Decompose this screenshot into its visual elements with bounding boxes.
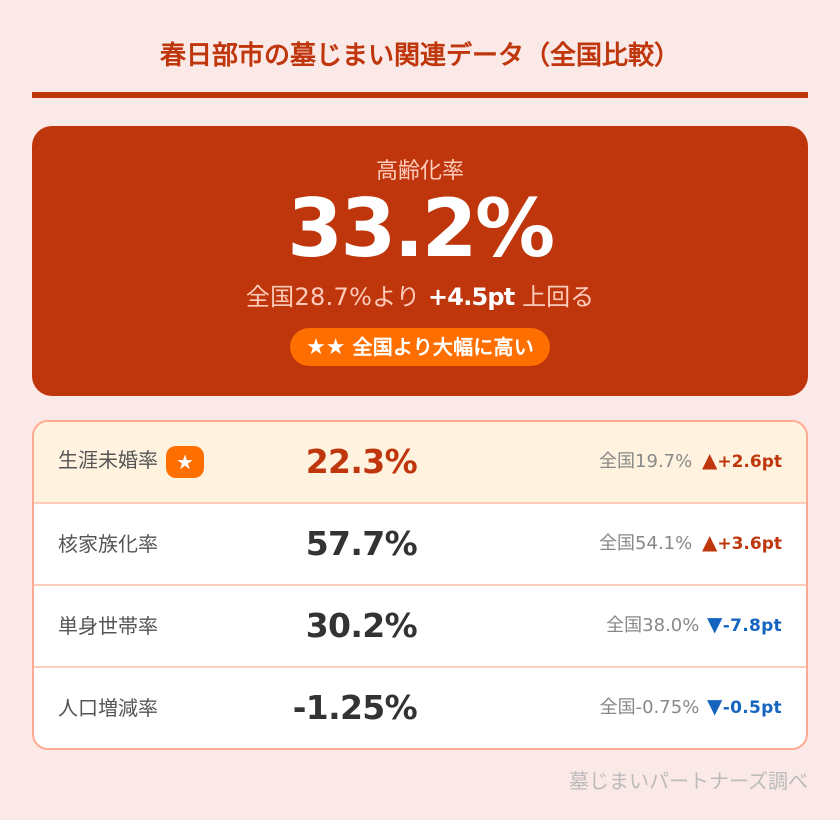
comparison: 全国54.1% ▲+3.6pt	[599, 530, 782, 554]
hero label: 高齢化率	[376, 159, 464, 184]
comparison: 全国38.0% ▼-7.8pt	[606, 612, 782, 636]
value: 22.3%	[306, 442, 417, 481]
hero value: 33.2%	[287, 182, 553, 275]
row: nuclear family rate	[58, 524, 782, 563]
panel: metrics table	[32, 420, 808, 750]
star badge	[166, 446, 204, 478]
label: 人口増減率	[58, 696, 158, 720]
row divider	[34, 502, 806, 504]
label: 単身世帯率	[58, 614, 158, 638]
title rule	[32, 92, 808, 98]
hero badge: ★★ 全国より大幅に高い	[306, 335, 534, 360]
row divider	[34, 666, 806, 668]
hero comparison: 全国28.7%より +4.5pt 上回る	[246, 283, 594, 311]
row divider	[34, 584, 806, 586]
star badge: ★	[176, 450, 194, 474]
row: single household rate	[58, 606, 782, 645]
source note: 墓じまいパートナーズ調べ	[569, 769, 808, 793]
row: population change rate	[58, 688, 782, 727]
value: 30.2%	[306, 606, 417, 645]
value: -1.25%	[293, 688, 417, 727]
row: never married rate	[34, 422, 806, 502]
label: 核家族化率	[58, 532, 158, 556]
panel: aging rate hero	[32, 126, 808, 396]
title: 春日部市の墓じまい関連データ（全国比較）	[160, 41, 680, 71]
label: 生涯未婚率	[58, 448, 158, 472]
hero badge	[290, 328, 550, 366]
value: 57.7%	[306, 524, 417, 563]
comparison: 全国-0.75% ▼-0.5pt	[600, 694, 782, 718]
comparison: 全国19.7% ▲+2.6pt	[599, 448, 782, 472]
